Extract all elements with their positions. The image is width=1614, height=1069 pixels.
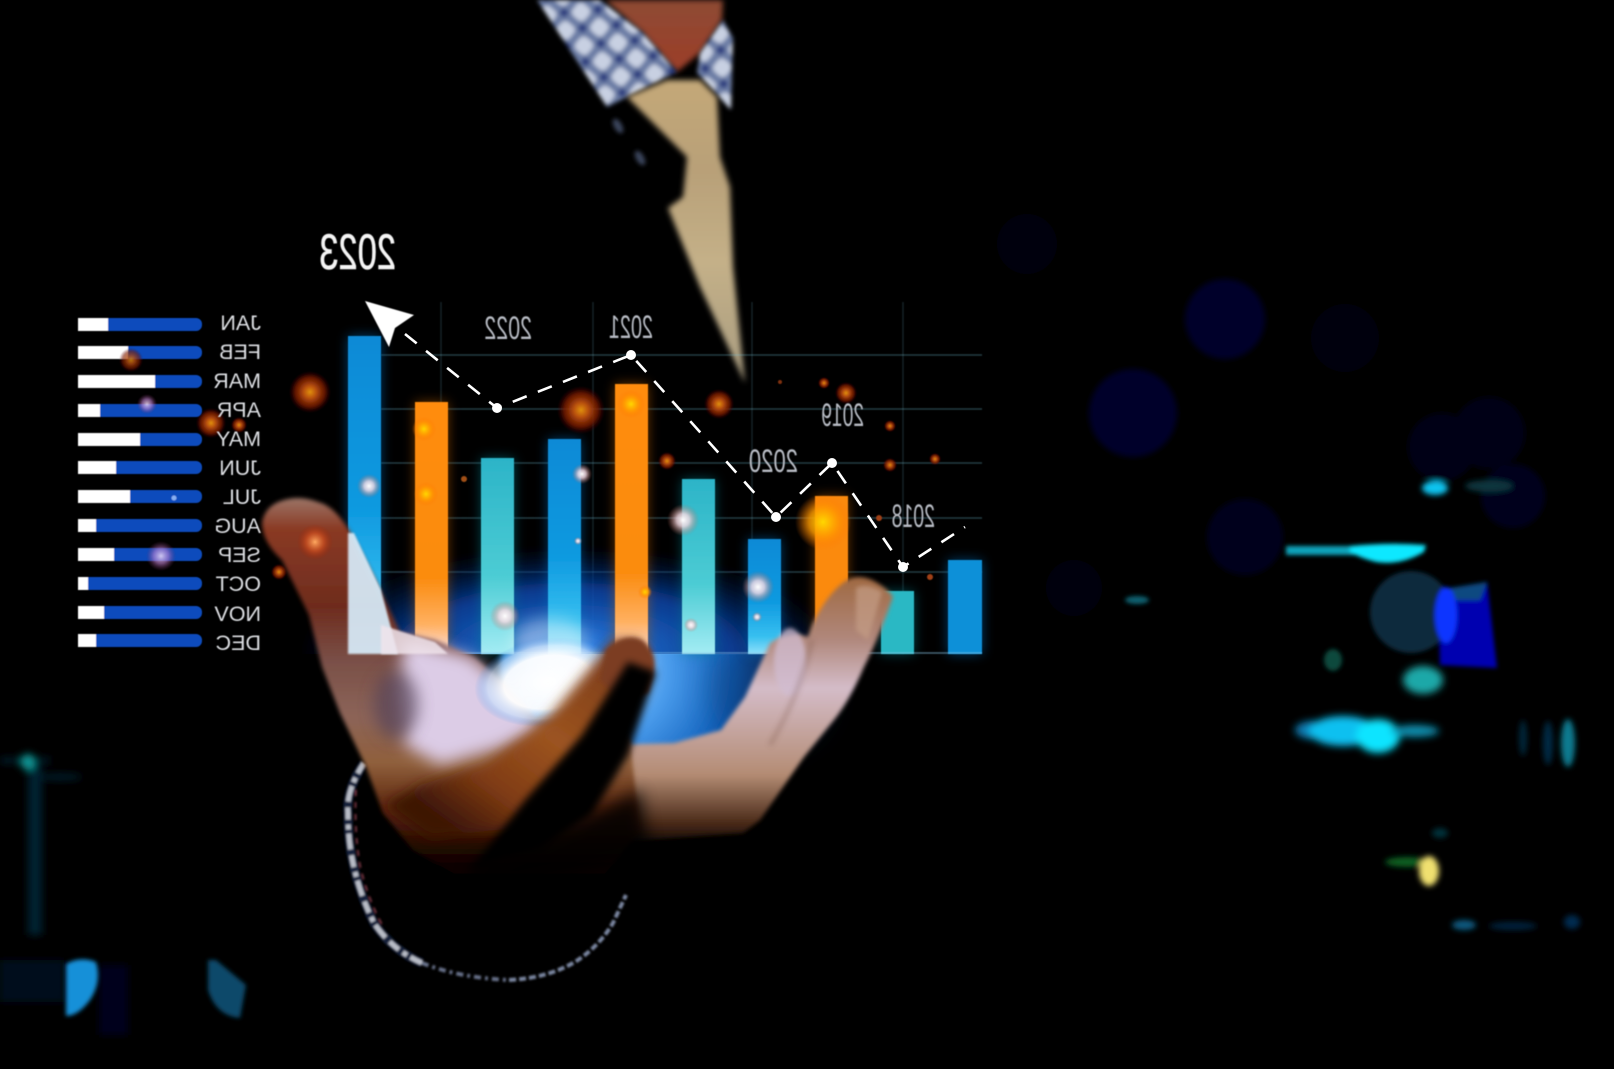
month labels mirrored: SEP xyxy=(218,543,261,567)
thumb overlay from bar xyxy=(348,533,398,654)
JAN bar xyxy=(78,318,202,331)
thumb red glow xyxy=(297,524,333,560)
little and ring fingers with right palm xyxy=(600,577,893,843)
middle finger tip xyxy=(600,638,655,700)
trend line points xyxy=(492,350,908,572)
middle finger orange side xyxy=(385,640,640,838)
year labels mirrored: 2020 xyxy=(749,443,798,479)
year labels mirrored: 2022 xyxy=(484,310,532,346)
DEC bar xyxy=(78,634,202,647)
hand holding chart xyxy=(262,498,893,980)
palm dark crease shading xyxy=(374,671,418,739)
OCT bar xyxy=(78,577,202,590)
central light burst xyxy=(469,628,627,736)
bar 8 orange xyxy=(815,496,848,654)
palm lower shadow xyxy=(470,790,650,900)
glowing particles xyxy=(196,371,941,632)
year labels mirrored: 2019 xyxy=(821,397,864,433)
shirt cuff xyxy=(348,763,626,980)
arrowhead xyxy=(365,301,414,347)
month labels mirrored: MAR xyxy=(213,369,261,393)
bar 10 blue xyxy=(948,560,982,654)
bar sparkles xyxy=(119,348,176,571)
shirt buttons xyxy=(611,117,647,167)
light glow beneath the chart xyxy=(496,632,802,748)
finger crease xyxy=(770,640,812,745)
MAR bar xyxy=(78,375,202,388)
palm and thumb xyxy=(262,498,640,880)
MAY bar xyxy=(78,433,202,446)
background bokeh lights: right side xyxy=(997,214,1580,930)
shirt collar xyxy=(537,0,733,110)
bar halo xyxy=(348,336,982,654)
month labels mirrored: JUL xyxy=(223,485,261,509)
neck xyxy=(605,0,723,72)
month labels mirrored: JUN xyxy=(219,456,261,480)
bar glow haze xyxy=(311,550,812,654)
month labels mirrored: DEC xyxy=(216,631,261,655)
palm light highlight xyxy=(398,640,540,765)
middle finger black shadow xyxy=(470,662,656,870)
FEB bar xyxy=(78,346,202,359)
year labels mirrored: 2021 xyxy=(609,309,653,345)
year labels mirrored: 2018 xyxy=(892,498,935,534)
JUN bar xyxy=(78,461,202,474)
month labels mirrored: OCT xyxy=(216,572,261,596)
bar 6 teal xyxy=(682,479,715,654)
fingertip highlights xyxy=(774,586,882,696)
month labels mirrored: MAY xyxy=(216,427,261,451)
bar 3 teal xyxy=(481,458,514,654)
bar 1 blue xyxy=(348,336,381,654)
necktie xyxy=(627,80,745,383)
month labels mirrored: FEB xyxy=(219,340,261,364)
bar chart xyxy=(311,328,990,662)
month labels mirrored: APR xyxy=(217,398,261,422)
APR bar xyxy=(78,404,202,417)
bar 9 teal xyxy=(881,591,914,654)
month progress bars xyxy=(78,318,202,647)
JUL bar xyxy=(78,490,202,503)
bar 2 orange xyxy=(415,402,448,654)
NOV bar xyxy=(78,606,202,619)
month labels mirrored: NOV xyxy=(214,602,261,626)
year labels mirrored xyxy=(484,309,935,534)
dashed trend line xyxy=(405,334,965,572)
AUG bar xyxy=(78,519,202,532)
month labels mirrored xyxy=(213,311,261,655)
month labels mirrored: JAN xyxy=(220,311,261,335)
bar 7 blue xyxy=(748,539,781,654)
SEP bar xyxy=(78,548,202,561)
bar 5 orange xyxy=(615,384,648,654)
year title 2023 mirrored: 2023 xyxy=(319,225,396,281)
bar 4 blue xyxy=(548,439,581,654)
background bokeh lights: bottom left xyxy=(0,754,246,1035)
businessman suit: tie, collar and neck xyxy=(537,0,745,383)
month labels mirrored: AUG xyxy=(214,514,261,538)
burst on bars xyxy=(512,618,588,666)
chart grid xyxy=(381,302,982,654)
